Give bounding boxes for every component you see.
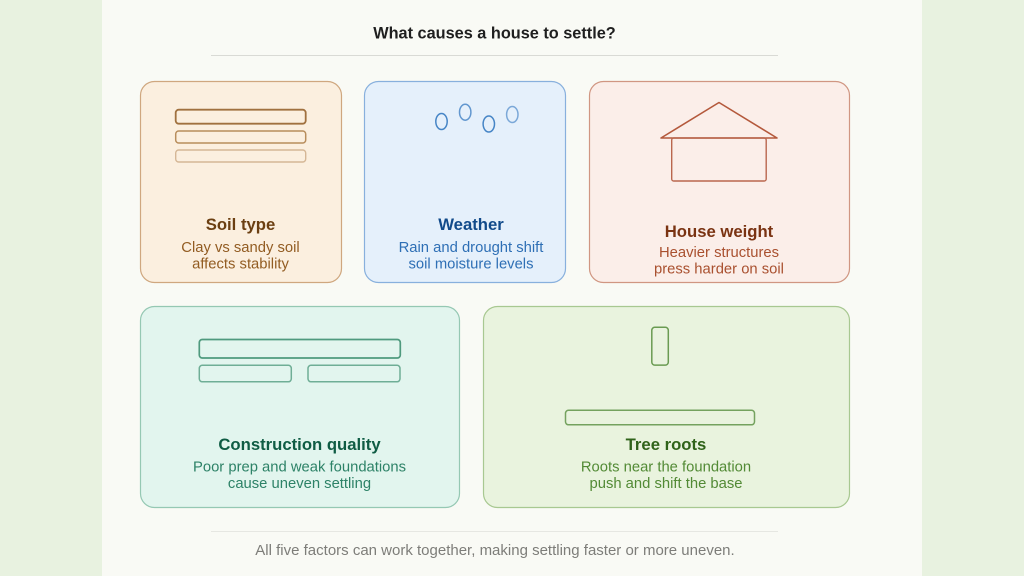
description: soil type: affects stability (192, 256, 289, 272)
description: construction quality: Poor prep and weak foundations (193, 460, 406, 476)
heading: tree roots: Tree roots (626, 435, 706, 454)
panel: tree roots (484, 306, 850, 508)
icon: house (661, 102, 777, 181)
description: house weight: press harder on soil (654, 262, 784, 278)
description: weather: Rain and drought shift (399, 240, 543, 256)
icon: rain drops (436, 104, 518, 132)
panel: construction quality (140, 306, 460, 508)
icon: soil layers (176, 110, 306, 162)
heading: weather: Weather (438, 215, 504, 234)
description: house weight: Heavier structures (659, 245, 779, 261)
icon: foundation blocks (199, 340, 400, 382)
footer note: All five factors can work together, making settling faster or more uneven. (255, 542, 735, 559)
description: tree roots: Roots near the foundation (581, 460, 751, 476)
title: What causes a house to settle? (373, 24, 616, 42)
panel: weather (364, 82, 566, 282)
panel: soil type (140, 82, 342, 282)
heading: house weight: House weight (665, 222, 774, 241)
description: construction quality: cause uneven settling (228, 476, 371, 492)
description: soil type: Clay vs sandy soil (181, 240, 300, 256)
description: weather: soil moisture levels (408, 256, 534, 272)
heading: soil type: Soil type (206, 215, 275, 234)
description: tree roots: push and shift the base (589, 476, 743, 492)
icon: tree and roots (566, 327, 754, 425)
heading: construction quality: Construction quality (218, 435, 381, 454)
panel: house weight (590, 82, 850, 282)
